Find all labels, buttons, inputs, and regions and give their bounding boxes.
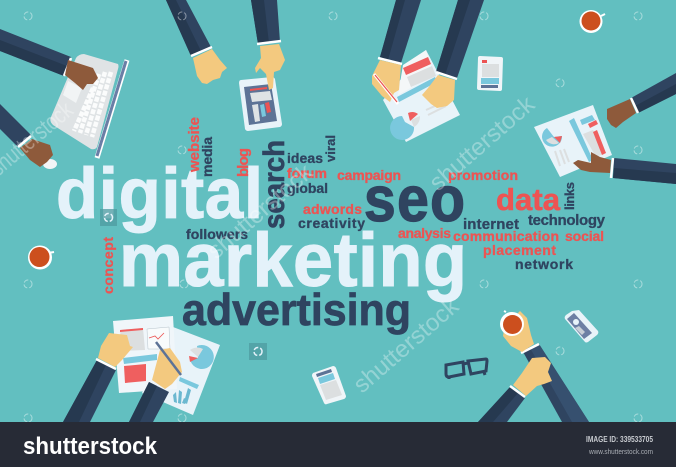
arm: bottom left hand with pen <box>129 342 182 422</box>
word: followers: followers <box>186 226 248 242</box>
icon: tablet <box>239 77 282 131</box>
footer url: www.shutterstock.com <box>588 447 653 456</box>
word: promotion: promotion <box>448 167 518 183</box>
word: website: website <box>186 117 203 173</box>
icon: laptop <box>50 54 127 158</box>
icon: coffee cup top right <box>580 10 605 33</box>
word: links: links <box>562 182 577 210</box>
word: communication: communication <box>453 228 559 244</box>
arm: bottom left hand <box>63 333 133 422</box>
word: forum: forum <box>287 165 327 181</box>
word: search: search <box>258 140 291 229</box>
word: digital: digital <box>56 154 263 233</box>
word: analysis: analysis <box>398 225 451 241</box>
word cloud <box>56 117 606 335</box>
word: data: data <box>496 182 561 217</box>
icon: calculator bottom <box>312 366 346 404</box>
word: social: social <box>565 228 604 244</box>
arm: top right right hand <box>422 0 484 108</box>
watermark: lower right: shutterstock <box>348 292 465 399</box>
footer logo: shutterstock <box>23 433 158 460</box>
word: network: network <box>515 256 573 272</box>
watermark badge: left <box>100 209 117 226</box>
footer image id: IMAGE ID: 339533705 <box>586 435 653 444</box>
document: top centre paper <box>383 50 460 142</box>
word: creativity: creativity <box>298 215 365 231</box>
word: media: media <box>199 137 215 177</box>
word: viral: viral <box>323 135 338 162</box>
arm: right upper hand <box>607 73 676 128</box>
icon: coffee cup left <box>28 246 54 270</box>
document: bottom left papers <box>113 316 220 415</box>
word: concept: concept <box>100 237 116 294</box>
word: ideas: ideas <box>287 150 323 166</box>
document: right paper <box>534 105 612 177</box>
footer bar <box>0 422 676 467</box>
watermarks <box>0 90 541 399</box>
word: placement: placement <box>483 242 556 258</box>
arm: top left on laptop <box>0 29 98 90</box>
word: blog: blog <box>235 148 252 177</box>
word: advertising: advertising <box>182 285 411 335</box>
word: marketing: marketing <box>119 217 467 302</box>
word: seo: seo <box>364 163 465 235</box>
word: internet: internet <box>463 216 519 233</box>
arm: bottom right holding cup <box>500 311 589 422</box>
arm: top centre left <box>166 0 227 84</box>
arm: top centre pointing <box>251 0 285 90</box>
arm: right lower hand <box>573 152 676 184</box>
watermark: centre: shutterstock <box>202 158 319 265</box>
word: campaign: campaign <box>337 167 401 183</box>
word: global: global <box>287 180 328 196</box>
icon: glasses <box>446 359 487 379</box>
word: technology: technology <box>528 212 606 229</box>
arm: lower left with mouse <box>0 104 57 169</box>
arm: top right left hand <box>372 0 421 104</box>
watermark badge: centre <box>249 343 267 360</box>
arm: bottom right lower hand <box>478 357 552 422</box>
icon: calculator top <box>477 56 503 91</box>
watermark: upper right: shutterstock <box>424 90 541 197</box>
icon: phone <box>565 310 598 342</box>
word: adwords: adwords <box>303 201 362 217</box>
